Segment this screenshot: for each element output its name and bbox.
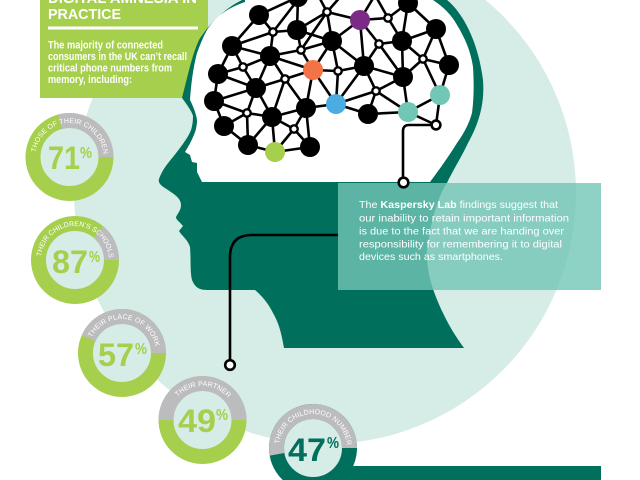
head silhouette (159, 0, 483, 348)
ring: their place of work 57% (78, 309, 166, 397)
findings text (359, 199, 569, 263)
small white nodes (239, 8, 427, 133)
intro text (48, 40, 187, 86)
ring: their partner 49%: % (216, 407, 228, 424)
ring: those of their children 71% (26, 113, 114, 201)
findings text: is due to the fact that we are handing over (359, 226, 565, 238)
findings text: responsibility for remembering it to digital (359, 238, 562, 250)
black nodes (204, 0, 459, 157)
ring: their children's schools 87%: % (89, 249, 100, 266)
intro text: critical phone numbers from (48, 62, 172, 74)
ring: their place of work 57%: 57 (98, 337, 134, 373)
ring: their place of work 57%: % (135, 341, 147, 358)
ring: their childhood number 47% (269, 404, 357, 480)
ring: their children's schools 87%: 87 (52, 244, 88, 280)
findings text: devices such as smartphones. (359, 251, 503, 263)
intro text: The majority of connected (48, 40, 163, 52)
ring: their childhood number 47%: % (327, 435, 339, 452)
ring: their partner 49%: 49 (178, 403, 216, 439)
ring: those of their children 71%: 71 (48, 140, 80, 176)
ring: their children's schools 87%: THEIR CHILDREN’S SCHOOLS (36, 221, 114, 258)
heading second line: PRACTICE (48, 6, 121, 23)
ring: their childhood number 47%: THEIR CHILDHOOD NUMBER (274, 409, 352, 445)
background pale circle (74, 0, 576, 444)
findings text: our inability to retain important information (359, 212, 569, 224)
ring: their partner 49% (158, 376, 246, 464)
ring: their children's schools 87% (31, 216, 119, 304)
panel: digital amnesia heading box (40, 0, 208, 98)
ring: their childhood number 47%: 47 (288, 432, 326, 468)
brain network (204, 0, 459, 162)
intro text: memory, including: (48, 74, 132, 86)
connector: neck to panel (225, 235, 338, 370)
bottom dark bar (335, 466, 601, 480)
findings text: The Kaspersky Lab findings suggest that (359, 199, 558, 211)
connector: brain to panel (399, 121, 440, 187)
ring: their place of work 57%: THEIR PLACE OF WORK (88, 314, 160, 346)
coloured nodes (265, 10, 450, 162)
network connections (214, 0, 449, 152)
ring: those of their children 71%: % (80, 145, 92, 162)
ring: those of their children 71%: THOSE OF THEIR CHILDREN (31, 118, 108, 154)
head interior white (185, 0, 474, 182)
intro text: consumers in the UK can’t recall (48, 51, 187, 63)
ring: their partner 49%: THEIR PARTNER (174, 381, 231, 398)
panel: Kaspersky Lab findings (338, 183, 601, 290)
